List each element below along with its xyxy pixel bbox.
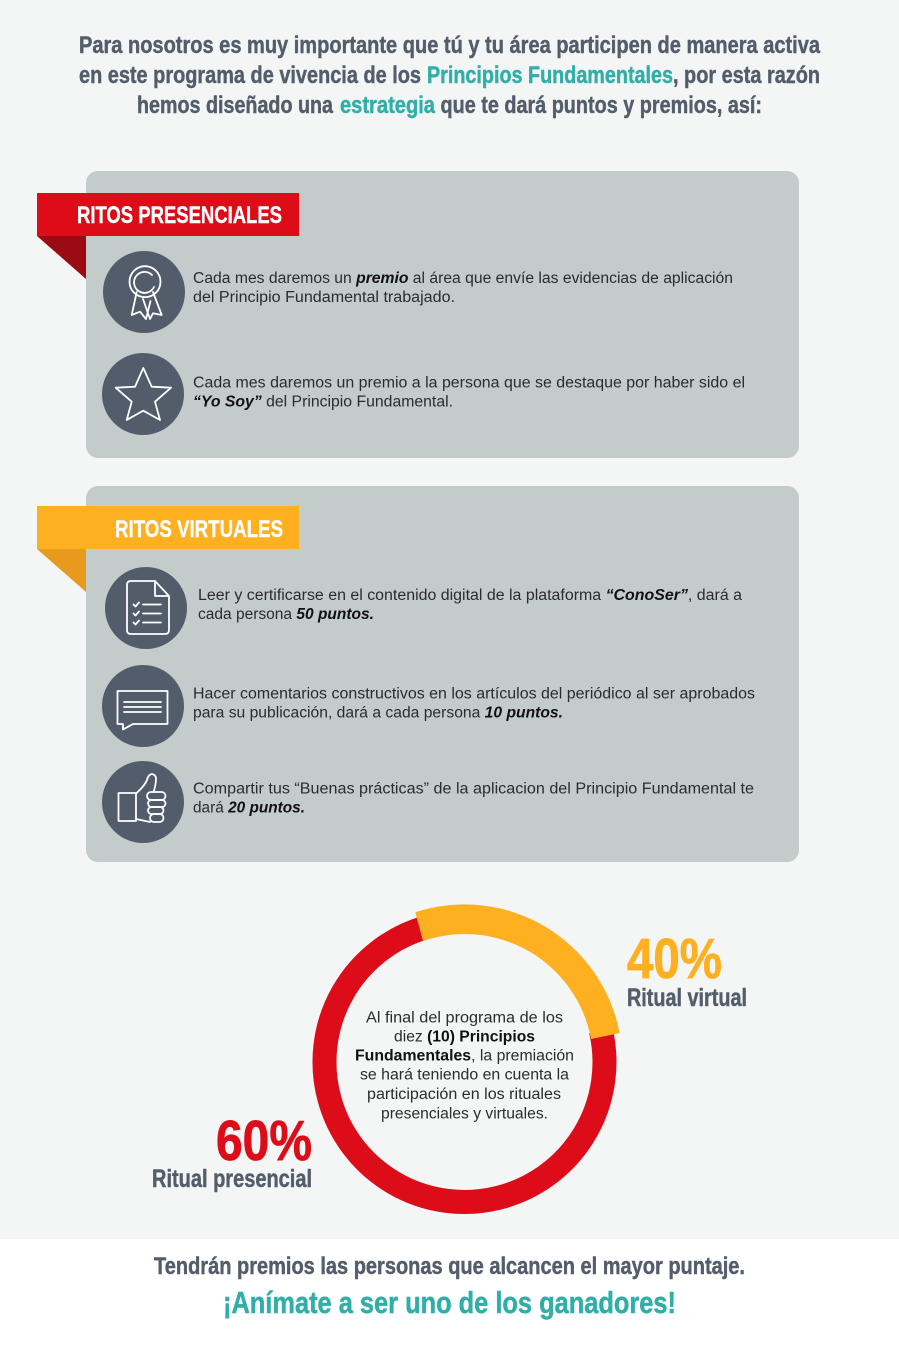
label: 60% ritual presencial bbox=[152, 1109, 312, 1193]
text: center of donut bbox=[355, 1010, 574, 1122]
text: center of donut: diez (10) Principios bbox=[394, 1028, 535, 1046]
text: yo soy: “Yo Soy” del Principio Fundamental. bbox=[193, 394, 453, 410]
title: introduction: Principios Fundamentales bbox=[427, 62, 673, 89]
closing text: ¡Anímate a ser uno de los ganadores! bbox=[223, 1285, 676, 1320]
title: introduction: estrategia bbox=[340, 92, 435, 119]
text: premio al área: del Principio Fundamental trabajado. bbox=[193, 289, 455, 306]
text: comentarios: Hacer comentarios constructivos en los artículos del periódico al ser aprobados bbox=[193, 685, 755, 702]
title: introduction: en este programa de vivencia de los bbox=[79, 62, 421, 89]
text: conoser: Leer y certificarse en el contenido digital de la plataforma “ConoSer”, dará a bbox=[198, 587, 742, 604]
label: 60% ritual presencial: Ritual presencial bbox=[152, 1165, 312, 1193]
icon: document checklist bbox=[105, 567, 187, 649]
text: yo soy: Cada mes daremos un premio a la persona que se destaque por haber sido el bbox=[193, 374, 745, 391]
label: 40% ritual virtual: 40% bbox=[627, 927, 722, 991]
text: yo soy bbox=[193, 374, 745, 410]
banner: ritos presenciales bbox=[37, 193, 299, 279]
label: 40% ritual virtual: Ritual virtual bbox=[627, 984, 747, 1012]
text: conoser bbox=[198, 587, 742, 623]
label: 60% ritual presencial: 60% bbox=[216, 1109, 312, 1173]
text: premio al área: Cada mes daremos un premio al área que envíe las evidencias de aplicación bbox=[193, 270, 733, 287]
text: center of donut: Fundamentales, la premiación bbox=[355, 1048, 574, 1064]
text: center of donut: presenciales y virtuales. bbox=[381, 1106, 548, 1122]
title: introduction: que te dará puntos y premios, así: bbox=[440, 92, 762, 119]
icon: star bbox=[102, 353, 184, 435]
text: center of donut: Al final del programa de los bbox=[366, 1010, 563, 1026]
title: introduction: , por esta razón bbox=[673, 62, 820, 89]
icon: medal bbox=[103, 251, 185, 333]
panel: ritos virtuales bbox=[37, 486, 799, 862]
banner: ritos presenciales: RITOS PRESENCIALES bbox=[77, 202, 282, 229]
banner: ritos virtuales: RITOS VIRTUALES bbox=[115, 516, 283, 543]
text: center of donut: se hará teniendo en cuenta la bbox=[360, 1067, 569, 1084]
title: introduction: hemos diseñado una bbox=[137, 92, 333, 119]
text: comentarios: para su publicación, dará a cada persona 10 puntos. bbox=[193, 704, 563, 722]
text: comentarios bbox=[193, 685, 755, 722]
text: center of donut: participación en los rituales bbox=[367, 1086, 561, 1103]
closing text bbox=[154, 1253, 745, 1320]
banner: ritos virtuales bbox=[37, 506, 299, 592]
text: buenas prácticas bbox=[193, 780, 754, 817]
text: buenas prácticas: dará 20 puntos. bbox=[193, 800, 305, 817]
panel: ritos presenciales bbox=[37, 171, 799, 458]
icon: thumbs up bbox=[102, 761, 184, 843]
text: conoser: cada persona 50 puntos. bbox=[198, 606, 374, 623]
closing text: Tendrán premios las personas que alcancen el mayor puntaje. bbox=[154, 1253, 745, 1280]
icon: comment bubble bbox=[102, 665, 184, 747]
text: buenas prácticas: Compartir tus “Buenas prácticas” de la aplicacion del Principio Fundamental te bbox=[193, 780, 754, 798]
donut chart: 60% presencial, 40% virtual bbox=[324, 904, 620, 1202]
text: premio al área bbox=[193, 270, 733, 306]
title: introduction bbox=[79, 32, 820, 119]
